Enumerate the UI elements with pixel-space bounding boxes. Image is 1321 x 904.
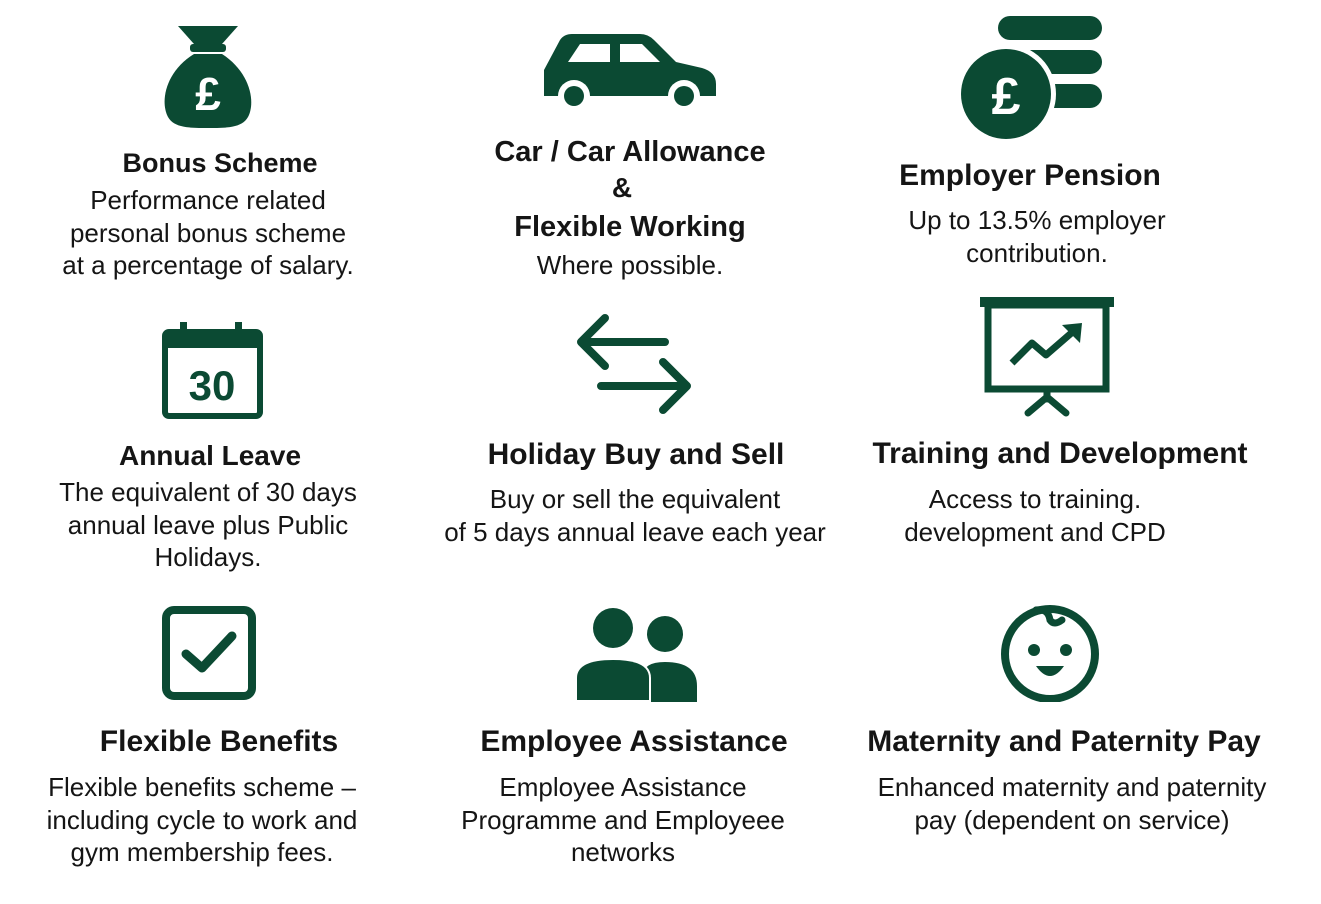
text: The equivalent of 30 days bbox=[59, 477, 357, 507]
icon: people bbox=[577, 608, 697, 702]
panel: bonus scheme bbox=[62, 26, 354, 280]
text bbox=[47, 772, 357, 867]
icon: checkbox bbox=[162, 606, 256, 700]
text: annual leave plus Public bbox=[68, 510, 348, 540]
panel: employee assistance bbox=[461, 608, 1096, 867]
text: at a percentage of salary. bbox=[62, 250, 354, 280]
title: Employee Assistance bbox=[480, 725, 788, 758]
title: Bonus Scheme bbox=[122, 148, 318, 178]
text: Access to training. bbox=[929, 484, 1141, 514]
text: personal bonus scheme bbox=[70, 218, 346, 248]
panel: pension bbox=[899, 16, 1166, 268]
text: pay (dependent on service) bbox=[914, 804, 1230, 834]
text bbox=[62, 185, 354, 280]
text: Performance related bbox=[90, 185, 326, 215]
text bbox=[461, 772, 785, 867]
panel: training bbox=[872, 297, 1248, 546]
text bbox=[904, 484, 1166, 546]
text: of 5 days annual leave each year bbox=[444, 516, 826, 546]
icon: money bag: £ bbox=[195, 68, 221, 120]
text: Employee Assistance bbox=[499, 772, 747, 802]
text bbox=[908, 205, 1166, 268]
text: contribution. bbox=[966, 238, 1108, 268]
text: Where possible. bbox=[537, 250, 723, 280]
text: Up to 13.5% employer bbox=[908, 205, 1166, 235]
title: Car / Car Allowance bbox=[494, 136, 766, 168]
panel: car bbox=[494, 34, 766, 280]
title: Flexible Benefits bbox=[100, 725, 338, 758]
text: including cycle to work and bbox=[47, 804, 357, 834]
icon: calendar bbox=[162, 322, 263, 419]
panel: flexible benefits bbox=[47, 606, 357, 867]
panel: maternity bbox=[867, 605, 1266, 834]
icon: calendar: 30 bbox=[189, 362, 235, 409]
text: networks bbox=[571, 837, 675, 867]
icon: coin stack: £ bbox=[992, 68, 1021, 126]
text: Flexible benefits scheme – bbox=[48, 772, 356, 802]
text: Enhanced maternity and paternity bbox=[878, 772, 1266, 802]
text bbox=[878, 772, 1266, 834]
text: Buy or sell the equivalent bbox=[490, 484, 780, 514]
title: Holiday Buy and Sell bbox=[488, 438, 784, 471]
title: Maternity and Paternity Pay bbox=[867, 725, 1261, 758]
title: Annual Leave bbox=[119, 440, 301, 471]
title: Flexible Working bbox=[514, 211, 746, 243]
panel: holiday buy and sell bbox=[444, 314, 826, 546]
text bbox=[59, 477, 357, 572]
icon: exchange arrows bbox=[577, 314, 691, 414]
text: development and CPD bbox=[904, 516, 1166, 546]
text: Holidays. bbox=[155, 542, 261, 572]
text bbox=[444, 484, 826, 546]
icon: money bag bbox=[164, 26, 252, 128]
title: Employer Pension bbox=[899, 159, 1161, 192]
icon: presentation board bbox=[980, 297, 1114, 416]
text: Programme and Employeee bbox=[461, 804, 785, 834]
title: Training and Development bbox=[872, 437, 1248, 470]
icon: car bbox=[544, 34, 716, 106]
icon: baby face bbox=[1001, 605, 1099, 702]
ampersand: & bbox=[612, 172, 632, 203]
text: gym membership fees. bbox=[70, 837, 333, 867]
icon: coin stack bbox=[961, 16, 1102, 139]
panel: annual leave bbox=[59, 322, 357, 572]
